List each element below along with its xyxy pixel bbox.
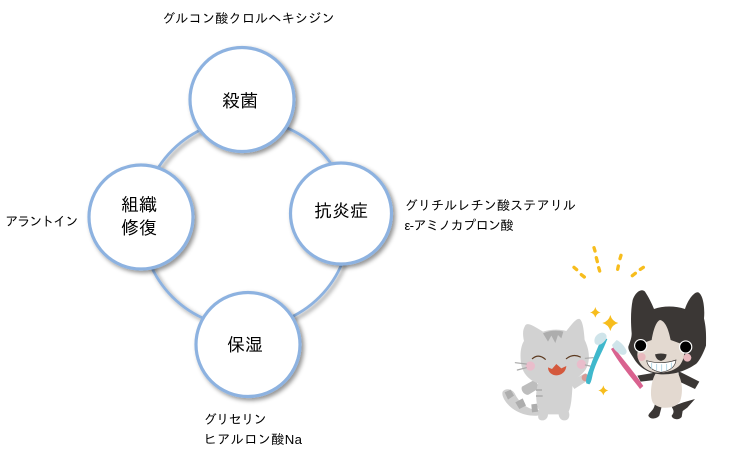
label: anti-inflammatory: 抗炎症 (314, 201, 368, 221)
dog (611, 290, 706, 419)
ingredient: glycyrrhetinate and aminocaproic acid: グリチルレチン酸ステアリル (404, 198, 576, 213)
ingredient: glycyrrhetinate and aminocaproic acid: ε-アミノカプロン酸 (404, 218, 513, 233)
toothbrush: pink (611, 340, 643, 389)
icon: gold stars (590, 307, 618, 395)
label: sterilization: 殺菌 (222, 91, 258, 111)
ingredient: glycerin and sodium hyaluronate: ヒアルロン酸Na (204, 432, 302, 447)
label: moisturizing: 保湿 (227, 335, 263, 355)
node: moisturizing (196, 292, 300, 396)
ingredient: glycerin and sodium hyaluronate (204, 412, 302, 447)
ingredient: glycerin and sodium hyaluronate: グリセリン (204, 412, 266, 427)
toothbrush: blue (582, 333, 607, 384)
label: tissue repair: 修復 (121, 218, 157, 238)
ingredient: chlorhexidine gluconate: グルコン酸クロルヘキシジン (162, 11, 335, 26)
label: tissue repair: 組織 (121, 195, 157, 215)
node: tissue repair (89, 165, 193, 269)
node: sterilization (190, 48, 294, 152)
label: tissue repair (121, 195, 157, 238)
ingredient: allantoin: アラントイン (5, 214, 77, 229)
connecting ring (142, 120, 350, 328)
icon: sparkle rays (574, 248, 643, 277)
node: anti-inflammatory (290, 163, 392, 264)
ingredient: glycyrrhetinate and aminocaproic acid (404, 198, 576, 233)
cat (502, 319, 607, 420)
